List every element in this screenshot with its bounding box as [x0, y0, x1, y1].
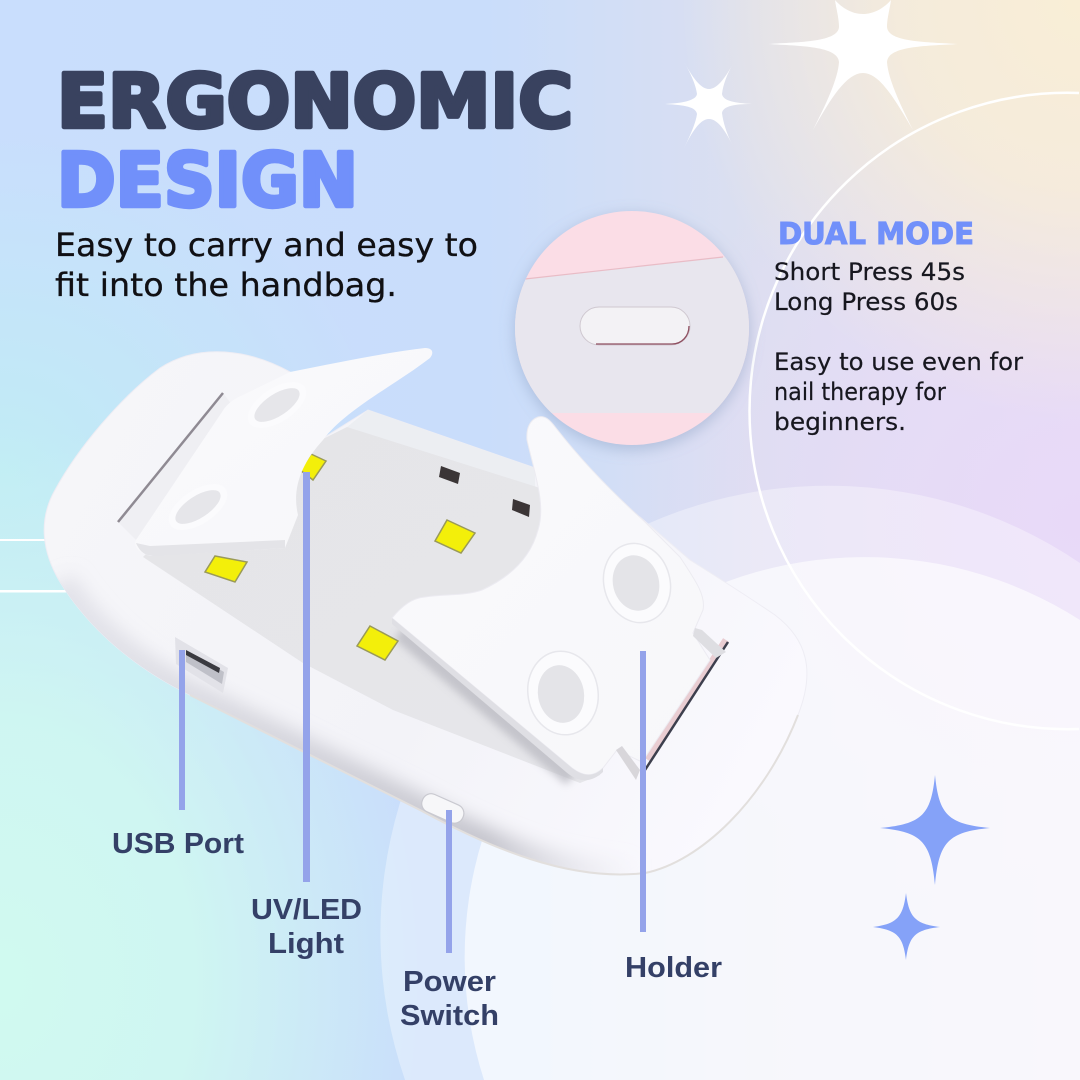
panel: dual mode text: Short Press 45s: [774, 258, 965, 286]
inset: power button closeup: [510, 208, 755, 450]
icon: large blue sparkle: [880, 775, 990, 885]
label: power switch: [400, 966, 499, 1032]
panel: dual mode text: beginners.: [774, 408, 906, 436]
title: DESIGN: [57, 138, 358, 224]
label: UV/LED light: UV/LED: [251, 894, 362, 926]
subtitle text: fit into the handbag.: [55, 266, 397, 304]
icon: large white sparkle: [768, 0, 958, 130]
label: holder: Holder: [625, 952, 722, 984]
lamp body: [44, 352, 807, 874]
icon: small white sparkle: [665, 62, 752, 148]
title: ERGONOMIC: [57, 59, 573, 145]
callout lines: [179, 472, 646, 953]
right holder: [392, 417, 726, 780]
panel: dual mode text: [774, 217, 1023, 436]
panel: dual mode text: nail therapy for: [774, 378, 946, 406]
holder cast shadow: [400, 632, 572, 778]
button: [580, 307, 690, 345]
usb port: [175, 637, 228, 693]
power switch: [419, 791, 467, 826]
subtitle text: [55, 226, 478, 304]
label: UV/LED light: [251, 894, 362, 960]
label: power switch: Switch: [400, 1000, 499, 1032]
icon: small blue sparkle: [873, 893, 940, 960]
tray vents: [439, 466, 530, 517]
label: UV/LED light: Light: [268, 928, 344, 960]
lamp lower shading: [60, 582, 645, 874]
label: power switch: Power: [403, 966, 496, 998]
subtitle text: Easy to carry and easy to: [55, 226, 478, 264]
product: UV lamp: [44, 348, 807, 874]
title: [57, 59, 573, 224]
panel: dual mode text: Easy to use even for: [774, 348, 1023, 376]
panel: dual mode text: Long Press 60s: [774, 288, 958, 316]
left holder: [135, 348, 432, 556]
led chips: [205, 454, 475, 660]
tray interior: [143, 427, 600, 783]
panel: dual mode text: DUAL MODE: [778, 217, 974, 252]
body slot lines: [118, 393, 236, 540]
label: USB port: USB Port: [112, 828, 244, 860]
callout labels: [112, 828, 722, 1032]
tray top wall: [347, 410, 535, 490]
